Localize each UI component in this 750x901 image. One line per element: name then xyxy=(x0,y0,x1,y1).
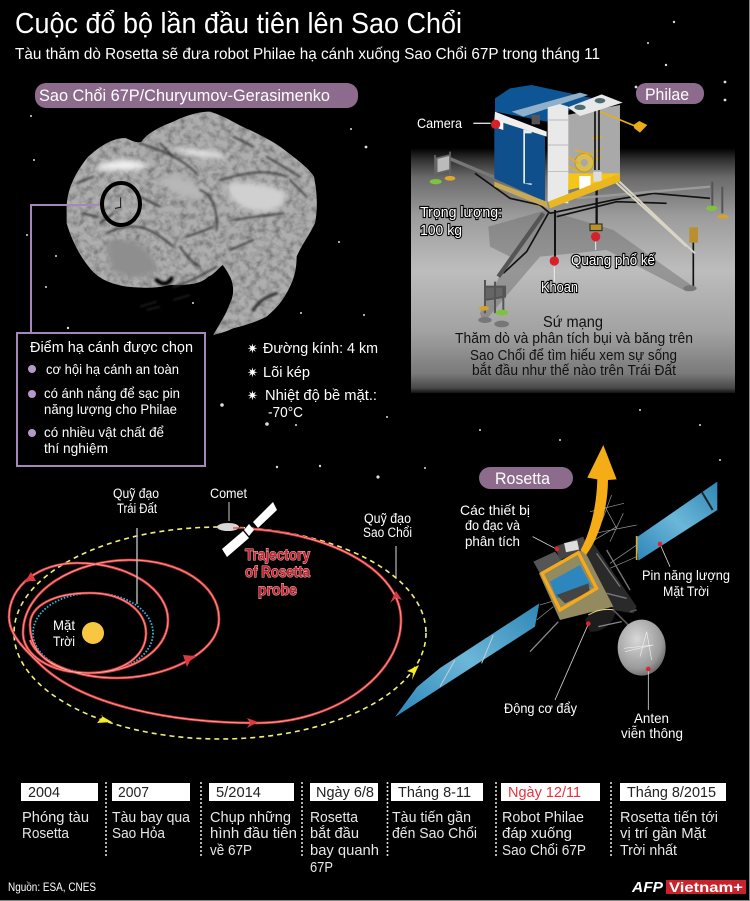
comet cracks xyxy=(77,137,307,310)
mission text: Sao Chổi để tìm hiểu xem sự sống xyxy=(470,347,677,364)
legs xyxy=(475,173,710,287)
mission text: Sứ mạng xyxy=(543,314,603,331)
callout: landing site: cơ hội hạ cánh an toàn xyxy=(46,361,179,377)
event: 2004: 2004 xyxy=(28,784,60,801)
callout: landing site: thí nghiệm xyxy=(44,440,108,456)
blue instrument xyxy=(550,565,592,598)
subtitle: Tàu thăm dò Rosetta sẽ đưa robot Philae hạ cánh xuống Sao Chổi 67P trong tháng 11 xyxy=(15,45,600,63)
callout: landing site: năng lượng cho Philae xyxy=(44,401,177,417)
trajectory arrowheads xyxy=(24,572,402,728)
label: antenna: viễn thông xyxy=(621,725,683,741)
yellow arrow xyxy=(581,445,617,555)
comet facts: ✷ xyxy=(247,366,258,381)
event: Ngày 12/11 xyxy=(501,783,600,859)
label: trajectory: of Rosetta xyxy=(245,564,310,581)
event: Tháng 8/2015 xyxy=(620,783,726,859)
event: 5/2014: Chụp những xyxy=(210,809,291,826)
comet facts: ✷ xyxy=(247,389,258,404)
event: 2004: Phóng tàu xyxy=(22,809,89,826)
event: Ngày 12/11: đáp xuống xyxy=(502,825,572,842)
label: trajectory: Trajectory xyxy=(245,547,310,564)
label: sun: Mặt xyxy=(53,617,75,633)
mission text xyxy=(455,314,693,379)
panel: comet xyxy=(35,83,358,335)
event: Tháng 8-11: Tháng 8-11 xyxy=(398,784,471,801)
label: thruster: Động cơ đẩy xyxy=(504,700,577,716)
callout: landing site xyxy=(17,333,205,466)
lander right bay xyxy=(567,105,620,183)
Philae label pill xyxy=(636,83,704,104)
thruster xyxy=(585,609,615,632)
Philae label pill: Philae xyxy=(645,85,689,104)
dish xyxy=(618,620,666,676)
callout: landing site: Điểm hạ cánh được chọn xyxy=(30,339,193,356)
label: antenna: Anten xyxy=(634,710,669,726)
timeline xyxy=(21,782,726,876)
label: weight value: 100 kg xyxy=(420,222,462,239)
lander top xyxy=(495,85,593,122)
event: 2007: Sao Hỏa xyxy=(112,825,166,842)
event: Tháng 8-11 xyxy=(391,783,483,842)
yellow base xyxy=(494,182,548,208)
label: sun xyxy=(53,617,75,649)
comet facts: Nhiệt độ bề mặt.: xyxy=(265,387,377,404)
chart: orbits xyxy=(9,485,426,739)
event: Tháng 8/2015: Rosetta tiến tới xyxy=(620,809,718,826)
label: comet orbit: Sao Chổi xyxy=(363,525,412,540)
event: 5/2014: hình đầu tiên xyxy=(210,825,297,842)
comet facts: -70°C xyxy=(268,404,303,421)
title: Cuộc đổ bộ lần đầu tiên lên Sao Chổi xyxy=(15,8,462,40)
label: spectrometer: Quang phổ kế xyxy=(571,253,655,269)
label: drill: Khoan xyxy=(541,280,578,296)
lander illustration xyxy=(430,85,728,327)
label: earth orbit xyxy=(113,486,159,604)
label: instruments: phân tích xyxy=(465,533,520,549)
label: weight: Trọng lượng: xyxy=(420,204,502,221)
source: Nguồn: ESA, CNES xyxy=(8,880,96,894)
event: 5/2014: về 67P xyxy=(210,842,252,859)
pointers xyxy=(533,537,670,710)
leg tubes xyxy=(447,157,710,277)
event: Ngày 12/11: Robot Philae xyxy=(502,809,584,826)
yellow square xyxy=(542,553,597,610)
label: trajectory: probe xyxy=(258,582,297,599)
Rosetta label pill: Rosetta xyxy=(495,470,551,488)
comet facts: ✷ xyxy=(247,342,258,357)
event: 5/2014: 5/2014 xyxy=(216,784,261,801)
callout: landing site: có ánh nắng để sạc pin xyxy=(44,385,180,401)
sun xyxy=(82,622,104,644)
event: 5/2014 xyxy=(209,783,297,859)
event: Tháng 8/2015: Tháng 8/2015 xyxy=(627,784,716,801)
spacecraft icon xyxy=(222,502,277,557)
spacecraft xyxy=(395,445,717,717)
feet xyxy=(430,152,728,327)
label: instruments: Các thiết bị xyxy=(460,502,530,518)
event: 2004 xyxy=(21,783,98,842)
sensor arms xyxy=(597,160,695,253)
label: instruments xyxy=(460,502,530,549)
left solar panel xyxy=(395,603,539,717)
event: Ngày 6/8: 67P xyxy=(310,859,333,876)
logo: Vietnam+ xyxy=(669,880,743,895)
event: 2004: Rosetta xyxy=(22,825,70,842)
comet icon xyxy=(210,485,247,531)
yellow boom xyxy=(600,112,635,126)
event: Ngày 6/8: Rosetta xyxy=(310,809,359,826)
comet facts xyxy=(247,340,378,421)
mission text: bắt đầu như thế nào trên Trái Đất xyxy=(472,362,677,379)
stars xyxy=(26,21,726,479)
label: solar panel: Mặt Trời xyxy=(663,583,709,599)
comet image xyxy=(67,112,317,335)
event: Tháng 8/2015: vị trí gần Mặt xyxy=(620,825,707,842)
event: 2007 xyxy=(112,783,191,842)
internal instruments xyxy=(568,173,620,190)
label: comet orbit xyxy=(363,511,412,577)
comet facts: Lõi kép xyxy=(263,364,310,381)
earth orbit xyxy=(33,593,153,673)
comet orbit xyxy=(14,527,426,739)
logo xyxy=(631,879,746,896)
comet dust below xyxy=(140,295,190,310)
panel: Rosetta xyxy=(395,445,730,741)
comet label pill: Sao Chổi 67P/Churyumov-Gerasimenko xyxy=(39,86,330,105)
antennas xyxy=(537,495,637,620)
comet facts: Đường kính: 4 km xyxy=(263,340,378,357)
label: antenna xyxy=(621,710,683,741)
event: 2007: 2007 xyxy=(118,784,149,801)
event: Tháng 8/2015: Trời nhất xyxy=(620,842,678,859)
landing site connector xyxy=(31,205,101,333)
label: solar panel xyxy=(642,567,730,599)
panel: Philae xyxy=(411,83,735,393)
right solar panel xyxy=(637,482,717,561)
label: comet orbit: Quỹ đạo xyxy=(364,511,411,526)
comet icon: Comet xyxy=(210,485,247,501)
label: earth orbit: Quỹ đạo xyxy=(113,486,159,501)
comet orbit arrowheads xyxy=(97,665,419,723)
body dark side xyxy=(582,538,637,613)
camera pointer xyxy=(473,121,491,125)
logo: AFP xyxy=(631,879,664,896)
event: 2007: Tàu bay qua xyxy=(112,809,191,826)
label: trajectory xyxy=(245,547,310,599)
top plate xyxy=(568,94,623,116)
body xyxy=(539,548,613,620)
lander blue side xyxy=(494,120,545,202)
label: solar panel: Pin năng lượng xyxy=(642,567,730,583)
label: camera: Camera xyxy=(417,115,462,131)
event: Ngày 6/8: bay quanh xyxy=(310,842,379,859)
white pillar xyxy=(548,104,568,203)
event: Tháng 8-11: Tàu tiến gần xyxy=(392,809,471,826)
event: Ngày 12/11: Ngày 12/11 xyxy=(508,784,581,801)
Rosetta trajectory xyxy=(9,529,401,723)
landing site ring xyxy=(102,183,140,225)
lander shadows xyxy=(480,210,693,323)
event: Tháng 8-11: đến Sao Chổi xyxy=(392,825,477,842)
event: Ngày 6/8: bắt đầu xyxy=(310,825,359,842)
landing site lines xyxy=(115,197,121,208)
label: earth orbit: Trái Đất xyxy=(117,501,157,516)
label: sun: Trời xyxy=(53,633,75,649)
label: instruments: đo đạc và xyxy=(465,517,520,533)
event: Ngày 6/8: Ngày 6/8 xyxy=(316,784,374,801)
event: Ngày 6/8 xyxy=(310,783,379,876)
comet light patches xyxy=(93,148,285,277)
callout: landing site: có nhiều vật chất để xyxy=(44,424,164,440)
Rosetta label pill xyxy=(479,467,573,489)
ground gradient xyxy=(411,148,735,393)
event: Ngày 12/11: Sao Chổi 67P xyxy=(502,842,586,859)
mission text: Thăm dò và phân tích bụi và băng trên xyxy=(455,330,693,347)
